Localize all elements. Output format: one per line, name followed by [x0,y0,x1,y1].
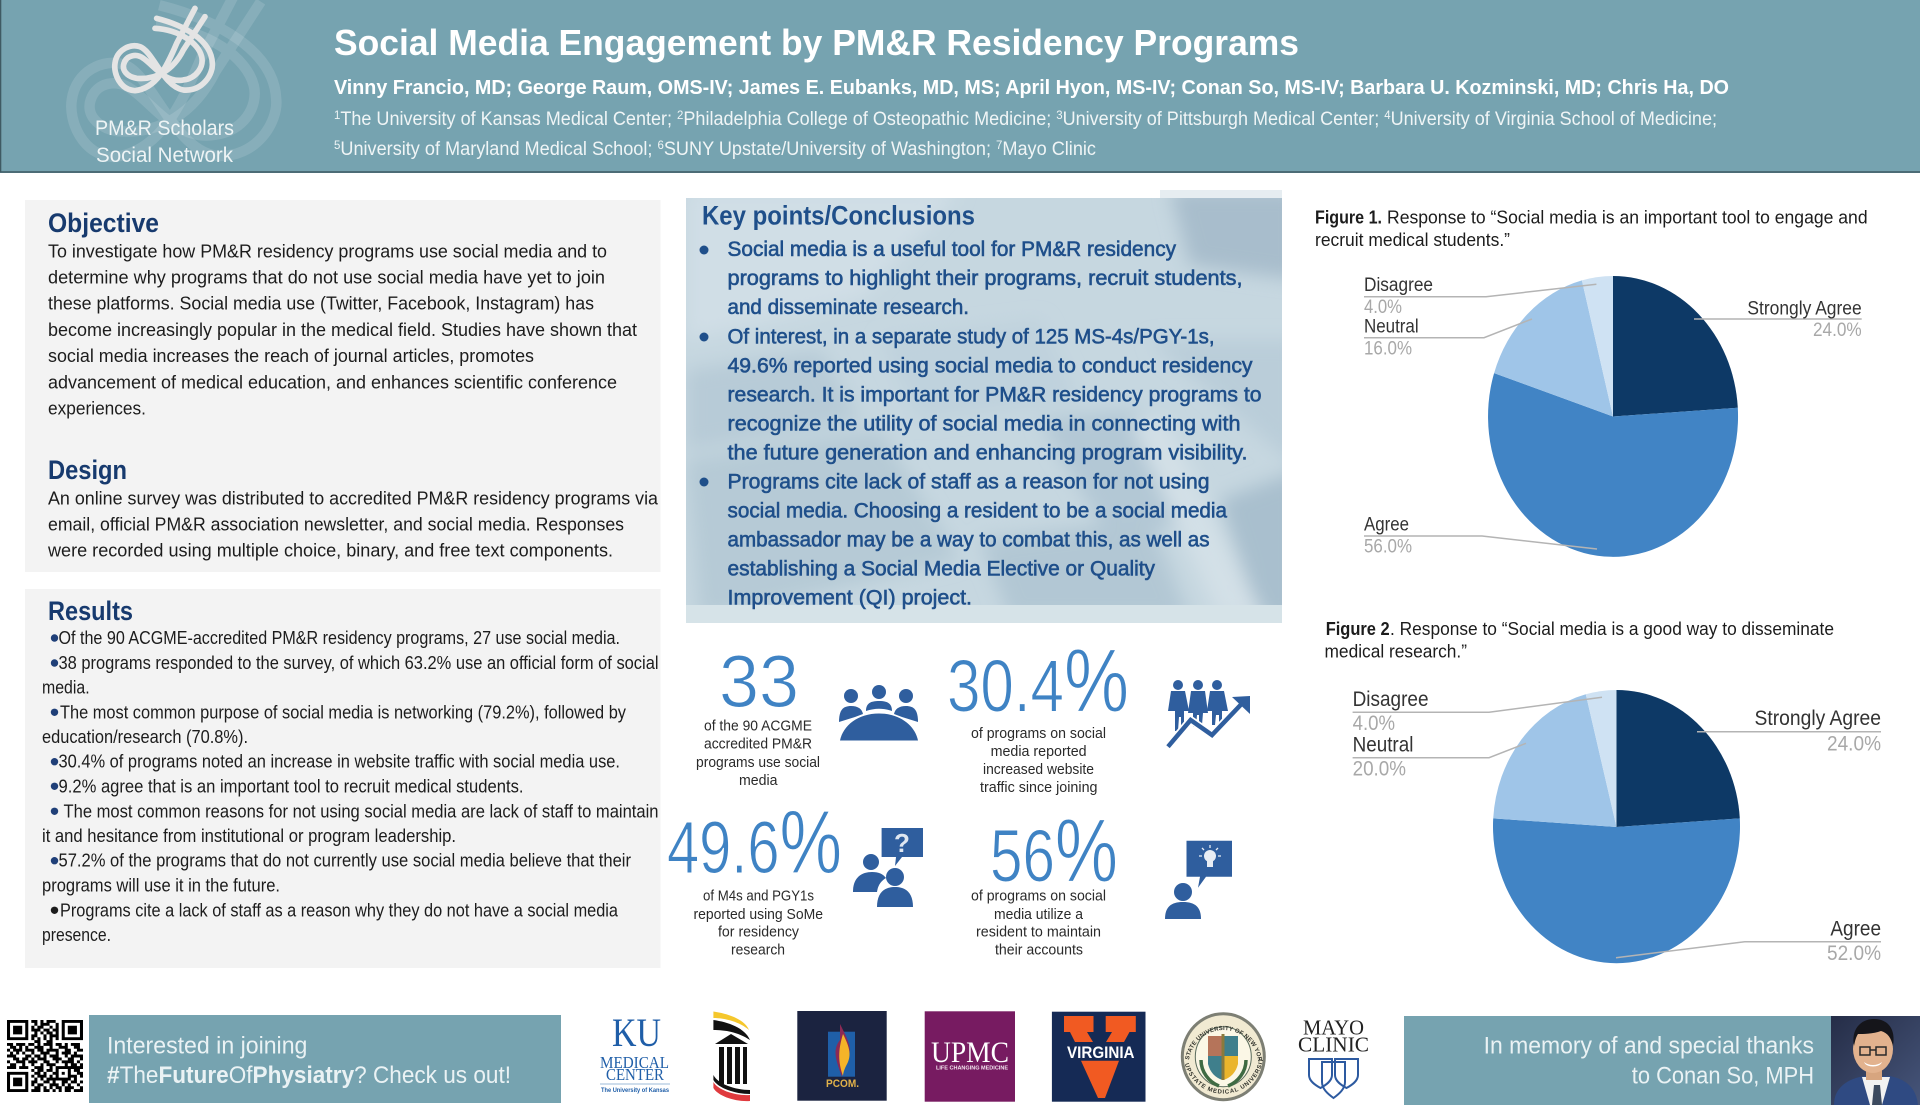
results text: 9.2% agree that is an important tool to recruit medical students. [58,775,524,796]
affiliations: University of Maryland Medical School; [340,139,657,160]
logo: UPMC: UPMC [931,1036,1009,1069]
pie labels: figure 2: 4.0% [1353,712,1395,735]
logo: PM&R Scholars knot [115,8,212,91]
objective text: become increasingly popular in the medical field. Studies have shown that [48,319,637,340]
stat: 49.6 percent [667,793,842,959]
footer banner: join: Interested in joining [107,1032,307,1059]
pie labels: figure 1: Strongly Agree [1747,298,1862,319]
key point text: recognize the utility of social media in connecting with [728,412,1240,436]
affiliations: 2 [677,108,684,122]
logo wordmark: PM&R Scholars [95,117,234,140]
key point text: research. It is important for PM&R residency programs to [728,382,1262,406]
pie labels: figure 2: 20.0% [1353,758,1406,781]
figure 1 caption: recruit medical students.” [1315,229,1510,250]
affiliations [334,108,1717,160]
portrait photo [1831,1016,1920,1105]
key point text: Social media is a useful tool for PM&R residency [728,237,1176,261]
stat: 33 programs: media [739,772,778,789]
affiliations: 1 [334,108,341,122]
key point text: and disseminate research. [728,295,969,319]
objective text: experiences. [48,398,146,419]
icon: people with question bubble [853,828,923,907]
affiliations: 4 [1384,108,1391,122]
stat: 49.6 percent: of M4s and PGY1s [703,888,814,905]
results text: The most common purpose of social media is networking (79.2%), followed by [60,701,627,722]
stat: 49.6 percent: research [731,942,785,959]
key point text: the future generation and enhancing program visibility. [728,441,1248,465]
stat: 56 percent: of programs on social [971,888,1106,905]
affiliations: SUNY Upstate/University of Washington; [664,139,996,160]
panel: objective and design [25,200,660,572]
key point text: programs to highlight their programs, recruit students, [728,266,1242,290]
pie labels: figure 2: Neutral [1353,734,1413,757]
pie labels: figure 2: Agree [1830,918,1881,941]
QR code [7,1020,83,1092]
footer banner: join: #TheFutureOfPhysiatry? Check us out! [107,1062,511,1089]
affiliations: University of Virginia School of Medicine; [1391,109,1717,130]
logo: Virginia [1052,1012,1146,1102]
design text: An online survey was distributed to accredited PM&R residency programs via [48,487,659,508]
key point text: Of interest, in a separate study of 125 MS-4s/PGY-1s, [728,324,1214,348]
objective text: To investigate how PM&R residency programs use social media and to [48,240,607,261]
icon: person with idea bubble [1165,841,1232,919]
affiliations: Mayo Clinic [1002,139,1096,160]
stat: 49.6 percent: 49.6% [667,793,842,893]
figure 2 caption: . Response to “Social media is a good way to disseminate [1390,618,1834,639]
pie labels: figure 2 [1353,688,1881,965]
objective text: social media increases the reach of journal articles, promotes [48,345,534,366]
stat: 56 percent: their accounts [995,942,1083,959]
results text: programs will use it in the future. [42,875,280,896]
affiliations: 7 [996,138,1003,152]
logo: PCOM [797,1011,887,1101]
pie labels: figure 1: 56.0% [1364,537,1412,558]
stat: 33 programs: 33 [719,640,799,723]
design text: email, official PM&R association newsletter, and social media. Responses [48,513,624,534]
stat: 30.4 percent: of programs on social [971,725,1106,742]
stat: 30.4 percent: 30.4% [947,632,1129,732]
logo: SUNY Upstate seal [1180,1012,1266,1102]
heading: results: Results [48,596,133,626]
objective text: these platforms. Social media use (Twitter, Facebook, Instagram) has [48,293,594,314]
stat: 30.4 percent: increased website [983,761,1094,778]
logo: SUNY Upstate seal: STATE UNIVERSITY OF NEW YORK [1185,1026,1262,1062]
logo: Mayo Clinic [1298,1015,1369,1098]
design text: were recorded using multiple choice, binary, and free text components. [47,540,613,561]
logo: Mayo Clinic: MAYO [1303,1015,1364,1039]
panel: results [25,589,660,968]
footer banner: join [89,1015,561,1103]
stat: 33 programs: programs use social [696,754,820,771]
logo wordmark [95,117,234,167]
header banner [0,0,1920,173]
logo: UPMC [925,1011,1015,1102]
results text: Of the 90 ACGME-accredited PM&R residency programs, 27 use social media. [58,627,620,648]
heading: design: Design [48,455,127,485]
pie labels: figure 1: Disagree [1364,275,1433,296]
pie labels: figure 1: 4.0% [1364,297,1402,318]
key point text: establishing a Social Media Elective or Quality [728,557,1155,581]
stat: 49.6 percent: reported using SoMe [694,906,823,923]
pie labels: figure 1: Agree [1364,515,1409,536]
logo: KU Medical Center: The University of Kansas [601,1087,669,1094]
results text: presence. [42,924,111,945]
results text: it and hesitance from institutional or program leadership. [42,825,456,846]
logo: University of Maryland [713,1012,750,1101]
affiliations: 3 [1056,108,1063,122]
figure 2 caption: Figure 2 [1326,618,1390,639]
pie labels: figure 2: Strongly Agree [1754,707,1881,730]
affiliations: 6 [657,138,664,152]
heading: key points: Key points/Conclusions [702,200,975,230]
logo: PCOM: PCOM. [826,1078,859,1090]
objective text: advancement of medical education, and enhances scientific conference [48,371,617,392]
logo: KU Medical Center: MEDICAL [600,1053,669,1072]
stat: 30.4 percent: traffic since joining [980,779,1098,796]
results bullets [51,634,58,914]
footer banner: memorial: In memory of and special thanks [1484,1032,1814,1059]
results text [42,627,658,945]
logo: Virginia: VIRGINIA [1067,1043,1134,1062]
key point text: ambassador may be a way to combat this, as well as [728,528,1210,552]
title: Social Media Engagement by PM&R Residency Programs [334,22,1299,63]
logo: SUNY Upstate seal: UPSTATE MEDICAL UNIVERSITY [1185,1058,1263,1094]
affiliations: The University of Kansas Medical Center; [340,109,677,130]
logo: KU Medical Center: CENTER [606,1065,665,1084]
objective text: determine why programs that do not use social media have yet to join [48,266,605,287]
icon: people with rising arrow [1168,680,1250,747]
figure 2 caption: medical research.” [1324,641,1467,662]
stat: 33 programs [696,640,820,789]
key point text: 49.6% reported using social media to conduct residency [728,353,1253,377]
affiliations: 5 [334,138,341,152]
pie labels: figure 1: Neutral [1364,317,1419,338]
affiliations: Philadelphia College of Osteopathic Medicine; [683,109,1056,130]
pie labels: figure 2: 24.0% [1827,733,1881,756]
pie labels: figure 1: 16.0% [1364,338,1412,359]
design text [47,487,659,561]
figure 1 [1315,206,1868,558]
figure 2 [1324,618,1881,965]
stat: 33 programs: of the 90 ACGME [704,718,812,735]
logo watermark [71,0,276,157]
results text: 38 programs responded to the survey, of which 63.2% use an official form of social [58,652,658,673]
results text: The most common reasons for not using social media are lack of staff to maintain [64,800,658,821]
pie labels: figure 2: Disagree [1353,688,1428,711]
stat: 33 programs: accredited PM&R [704,736,812,753]
pie labels: figure 1 [1364,275,1862,558]
stat: 56 percent [971,802,1118,959]
footer banner: memorial: to Conan So, MPH [1632,1062,1814,1089]
heading: objective: Objective [48,208,159,238]
affiliations: University of Pittsburgh Medical Center; [1063,109,1384,130]
footer banner: memorial [1404,1016,1831,1105]
pie chart: figure 1 [1488,276,1738,557]
results text: 57.2% of the programs that do not currently use social media believe that their [58,850,631,871]
figure 1 caption [1315,206,1868,250]
panel: key points and conclusions [686,190,1300,623]
key point bullets [700,246,708,486]
objective text [48,240,637,419]
key point text [728,237,1262,610]
key point text: social media. Choosing a resident to be a social media [728,499,1227,523]
results text: 30.4% of programs noted an increase in website traffic with social media use. [58,751,620,772]
logo wordmark: Social Network [96,144,233,167]
authors: Vinny Francio, MD; George Raum, OMS-IV; James E. Eubanks, MD, MS; April Hyon, MS-IV; Conan So, MS-IV; Barbara U. Kozminski, MD; Chris Ha, DO [334,77,1729,99]
stat: 49.6 percent: for residency [718,924,799,941]
pie labels: figure 1: 24.0% [1813,320,1862,341]
stat: 56 percent: media utilize a [994,906,1084,923]
stat: 30.4 percent: media reported [991,743,1087,760]
figure 2 caption [1324,618,1834,662]
icon: people with question bubble: ? [894,828,910,858]
key point text: Improvement (QI) project. [728,586,972,610]
logo: Mayo Clinic: CLINIC [1298,1033,1369,1057]
pie chart: figure 2 [1493,690,1740,963]
stat: 56 percent: resident to maintain [976,924,1101,941]
figure 1 caption: Figure 1. [1315,206,1382,227]
logo: KU Medical Center [600,1010,670,1094]
icon: people at a table [839,685,918,740]
figure 1 caption: Response to “Social media is an important tool to engage and [1387,206,1868,227]
logo: KU Medical Center: KU [612,1010,661,1055]
results text: education/research (70.8%). [42,726,248,747]
logo: UPMC: LIFE CHANGING MEDICINE [936,1065,1008,1071]
stat: 30.4 percent [947,632,1129,796]
pie labels: figure 2: 52.0% [1827,942,1881,965]
stat: 56 percent: 56% [990,802,1118,902]
key point text: Programs cite lack of staff as a reason for not using [728,470,1210,494]
results text: media. [42,677,90,698]
results text: Programs cite a lack of staff as a reason why they do not have a social media [60,899,619,920]
